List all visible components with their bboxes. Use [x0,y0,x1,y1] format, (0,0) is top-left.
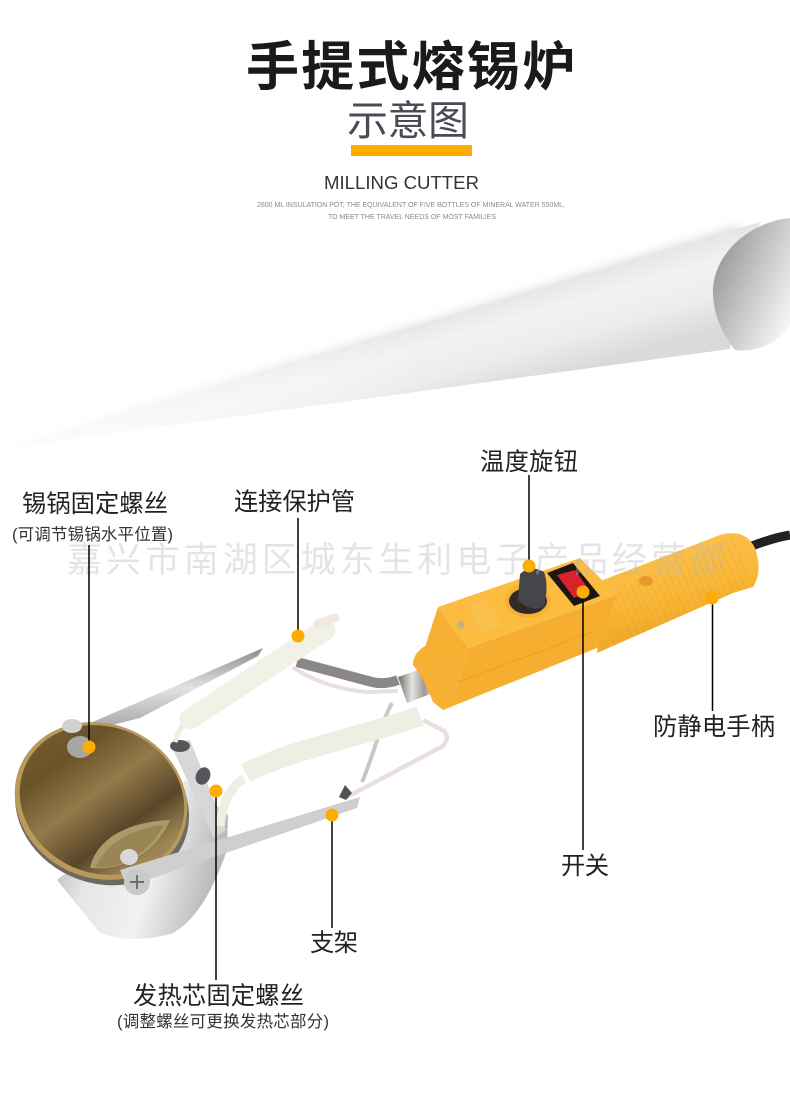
watermark: 嘉兴市南湖区城东生利电子产品经营部 [67,541,725,580]
callout: heating core fixing screw: 发热芯固定螺丝 [133,983,304,1010]
english description: TO MEET THE TRAVEL NEEDS OF MOST FAMILIES [328,214,496,221]
control box top face [438,558,617,648]
outer top screw [62,719,82,733]
wire loop [347,720,447,797]
grip vent hole [639,576,653,586]
clip loops [170,740,213,787]
callout: switch [561,586,609,880]
arm screw [124,869,150,895]
subtitle accent bar [351,145,472,156]
inner screw [67,736,93,758]
callout: tin pot fixing screw [12,491,173,754]
callout: heating core fixing screw [117,784,329,1031]
grip ridges [620,587,752,643]
label recess [467,600,503,633]
callout: temperature knob: 温度旋钮 [480,449,578,476]
pot bands [0,701,214,913]
lower tube wires [220,779,244,826]
callout: heating core fixing screw: (调整螺丝可更换发热芯部分) [117,1012,329,1031]
box screw [457,621,465,629]
callout: bracket [310,808,358,957]
nose [413,645,457,710]
title: 手提式熔锡炉 [246,38,575,97]
heating core steel tube [297,662,398,683]
bracket strip [170,740,226,838]
connecting tube 1 [190,630,325,719]
callout: antistatic handle [653,592,775,741]
subtitle: 示意图 [347,98,469,144]
power cord [752,535,790,546]
english description: 2800 ML INSULATION POT, THE EQUIVALENT OF FIVE BOTTLES OF MINERAL WATER 550ML, [257,202,565,209]
bottom inner screw [120,849,138,865]
callout: tin pot fixing screw: 锡锅固定螺丝 [22,491,168,518]
callout: temperature knob [480,449,578,572]
callout: bracket: 支架 [310,930,358,957]
knob base [505,584,551,618]
pot interior [0,699,208,901]
pot rim [0,695,213,907]
knob [509,568,547,614]
callout: antistatic handle: 防静电手柄 [653,714,775,741]
control box ridge [458,632,592,682]
rear wire [362,703,392,782]
english description [257,202,565,221]
product photo: tin melting pot [0,533,790,939]
callout: tin pot fixing screw: (可调节锡锅水平位置) [12,525,173,544]
pot base [90,820,170,868]
english heading: MILLING CUTTER [324,173,479,193]
callout: connecting protective tube: 连接保护管 [234,489,355,516]
connecting tube 2 [246,716,420,773]
control box front face [443,595,617,710]
wire clip [339,785,352,800]
braided tube tip [318,618,335,624]
lower support arm [120,797,360,884]
control box left face [425,607,468,695]
decorative paper curl [12,218,790,447]
grip cylinder [597,533,759,653]
connecting tube wires [175,718,190,742]
callout: connecting protective tube [234,489,355,642]
callout: switch: 开关 [561,853,609,880]
metal collar [398,668,433,703]
heating wire [293,667,398,692]
upper support arm [88,648,263,728]
pot outer body [57,780,228,939]
rocker switch [547,563,600,606]
